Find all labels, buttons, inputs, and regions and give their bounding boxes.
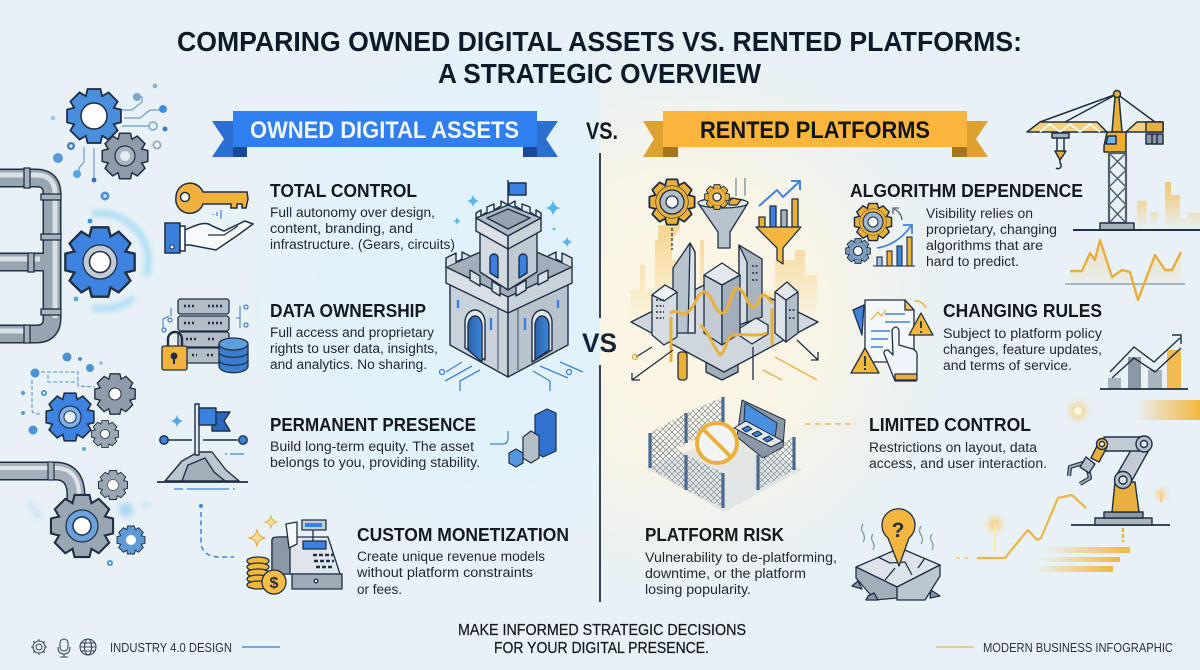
heading: limited control: access, and user interaction.: [869, 456, 1047, 471]
heading: limited control: [869, 415, 1047, 471]
heading: algorithm dependence: Visibility relies on: [926, 206, 1033, 221]
gripper: [1069, 457, 1095, 484]
heading: total control: TOTAL CONTROL: [270, 181, 417, 201]
icon: fence with no sign: [646, 397, 802, 512]
icon: small bar blocks: [490, 409, 556, 467]
legs and arrows: [632, 340, 818, 380]
skyline: [630, 215, 817, 321]
icon: broken ground with question pin: [852, 509, 940, 600]
limited control connector: [805, 423, 856, 425]
heading: total control: Full autonomy over design,: [270, 205, 435, 220]
heading: data ownership: [270, 301, 438, 372]
icon: small outline gear: [99, 471, 127, 499]
left decoration: pipes: [0, 168, 61, 343]
heading: platform risk: Vulnerability to de-platforming,: [645, 550, 837, 565]
heading: data ownership: Full access and proprietary: [270, 325, 434, 340]
heading: data ownership: rights to user data, insights,: [270, 341, 438, 356]
vs label top: VS.: [586, 118, 618, 145]
icon: server, lock and database: [162, 299, 248, 373]
heading: changing rules: [943, 301, 1102, 373]
doors: [458, 300, 558, 370]
icon: grey cluster gear: [96, 374, 134, 414]
footer: right tag: MODERN BUSINESS INFOGRAPHIC: [983, 640, 1173, 655]
footer: call to action: [458, 622, 746, 657]
left decoration: upper gears and circuits: [51, 84, 168, 200]
illustration: city and funnels: [630, 178, 818, 380]
icon: grey gear: [103, 134, 147, 178]
walls: [446, 240, 572, 377]
heading: algorithm dependence: hard to predict.: [926, 254, 1019, 269]
heading: changing rules: changes, feature updates,: [943, 342, 1102, 357]
icon: policy document, hand and warnings: [851, 300, 933, 381]
title: [177, 26, 1022, 89]
heading: changing rules: and terms of service.: [943, 358, 1072, 373]
icon: broken ground with question pin: ?: [892, 519, 904, 542]
dashed connector: [199, 504, 234, 557]
heading: algorithm dependence: algorithms that are: [926, 238, 1043, 253]
mesh back: [650, 397, 723, 468]
heading: custom monetization: or fees.: [357, 582, 402, 597]
heading: total control: [270, 181, 455, 252]
heading: total control: infrastructure. (Gears, circuits): [270, 237, 455, 252]
icon: flag on a rock: [157, 404, 248, 489]
gold wave: [670, 288, 773, 362]
gold gear: [650, 180, 694, 224]
heading: total control: content, branding, and: [270, 221, 413, 236]
footer: left tag with icons: INDUSTRY 4.0 DESIGN: [110, 640, 232, 655]
heading: permanent presence: belongs to you, providing stability.: [270, 455, 480, 470]
heading: changing rules: CHANGING RULES: [943, 301, 1102, 321]
mesh front: [650, 433, 794, 508]
gold funnel and bars: [756, 181, 801, 264]
heading: changing rules: Subject to platform policy: [943, 326, 1102, 341]
center divider and VS: VS: [582, 328, 617, 358]
footer: call to action: MAKE INFORMED STRATEGIC DECISIONS: [458, 622, 746, 639]
icon: large grey gear: [52, 496, 112, 556]
tower: [476, 201, 541, 290]
heading: permanent presence: [270, 415, 480, 470]
title: COMPARING OWNED DIGITAL ASSETS VS. RENTED PLATFORMS:: [177, 26, 1022, 57]
grey funnel: [698, 185, 748, 248]
sparkles: [453, 195, 573, 248]
heading: limited control: LIMITED CONTROL: [869, 415, 1031, 435]
heading: platform risk: PLATFORM RISK: [645, 525, 784, 545]
no sign: [697, 423, 737, 463]
heading: platform risk: losing popularity.: [645, 582, 751, 597]
heading: platform risk: downtime, or the platform: [645, 566, 806, 581]
banner: rented platforms: [643, 111, 988, 157]
icon: blue gear: [68, 90, 120, 142]
heading: data ownership: DATA OWNERSHIP: [270, 301, 426, 321]
icon: small grey gear: [92, 421, 118, 447]
heading: custom monetization: [356, 525, 569, 597]
rising gold line with fading bars: [956, 495, 1130, 572]
flag: [508, 180, 526, 204]
footer: call to action: FOR YOUR DIGITAL PRESENCE.: [494, 640, 709, 657]
platform: [631, 275, 818, 380]
banner: owned digital assets: [212, 111, 558, 157]
icon: cash register with coins: [247, 516, 342, 594]
heading: custom monetization: CUSTOM MONETIZATION: [357, 525, 569, 545]
title: A STRATEGIC OVERVIEW: [438, 58, 762, 89]
circuits: [440, 362, 583, 391]
banner: owned digital assets: OWNED DIGITAL ASSETS: [250, 117, 519, 144]
heading: algorithm dependence: [850, 181, 1083, 269]
heading: permanent presence: Build long-term equity. The asset: [270, 439, 474, 454]
glow decorations: [988, 400, 1200, 552]
icon: algorithm gears and bars: [846, 204, 915, 266]
left decoration: lower gear cluster: [21, 352, 134, 451]
icon: key and hand: [165, 183, 253, 253]
buildings: [652, 243, 798, 345]
heading: platform risk: [645, 525, 837, 597]
icon: cash register with coins: $: [270, 575, 279, 592]
terminal: [734, 400, 785, 458]
left decoration: bottom pipe and gears: [0, 462, 149, 566]
heading: permanent presence: PERMANENT PRESENCE: [270, 415, 476, 435]
icon: construction crane: [1027, 90, 1163, 230]
icon: blue cluster gear: [47, 394, 93, 440]
icon: small blue gear: [118, 526, 144, 554]
heading: limited control: Restrictions on layout, data: [869, 440, 1038, 455]
heading: custom monetization: without platform constraints: [356, 565, 533, 580]
icon: large glowing gear: [66, 213, 148, 309]
banner: rented platforms: RENTED PLATFORMS: [700, 117, 930, 144]
heading: custom monetization: Create unique revenue models: [357, 549, 545, 564]
heading: algorithm dependence: proprietary, changing: [926, 222, 1057, 237]
icon: castle: [440, 180, 583, 391]
heading: data ownership: and analytics. No sharing.: [270, 357, 427, 372]
heading: algorithm dependence: ALGORITHM DEPENDENCE: [850, 181, 1083, 201]
icon: robotic arm: [1069, 436, 1170, 525]
crane skyline and line chart: [1065, 182, 1200, 300]
chart: rising bars with arrow: [1100, 335, 1188, 389]
footer: left tag with icons: [31, 639, 280, 657]
